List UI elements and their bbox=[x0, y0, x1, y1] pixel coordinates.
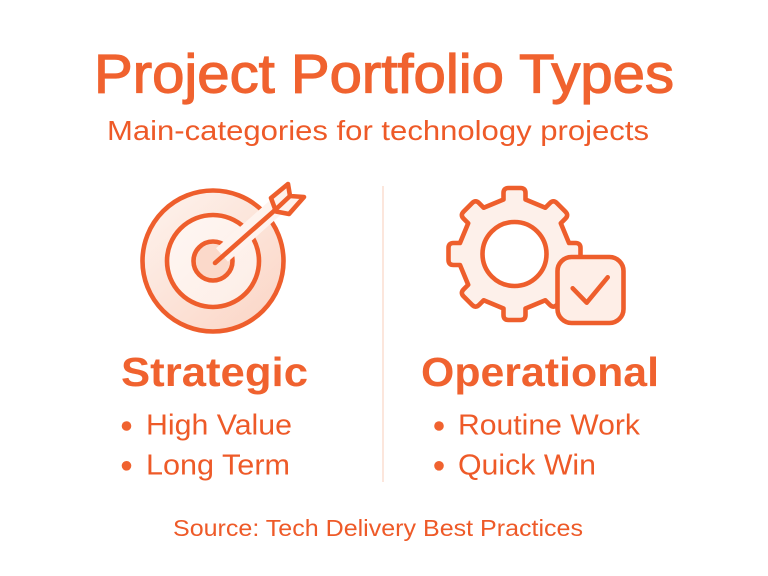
list: operational points: Quick Win bbox=[458, 449, 596, 481]
source note: Source: Tech Delivery Best Practices bbox=[173, 515, 583, 541]
subtitle: Main-categories for technology projects bbox=[107, 115, 649, 146]
list: operational points bbox=[434, 409, 641, 481]
heading: operational: Operational bbox=[421, 349, 659, 395]
list: strategic points bbox=[122, 409, 292, 481]
icon: gear with checkbox bbox=[448, 188, 624, 323]
heading: strategic: Strategic bbox=[121, 349, 308, 395]
icon: target with arrow bbox=[142, 184, 304, 332]
list: strategic points: Long Term bbox=[146, 449, 290, 481]
list: strategic points: High Value bbox=[146, 409, 292, 441]
divider bbox=[382, 186, 384, 482]
title: Project Portfolio Types bbox=[94, 42, 674, 104]
panel: operational bbox=[421, 188, 659, 481]
list: operational points: Routine Work bbox=[458, 409, 641, 441]
panel: strategic bbox=[121, 184, 308, 481]
